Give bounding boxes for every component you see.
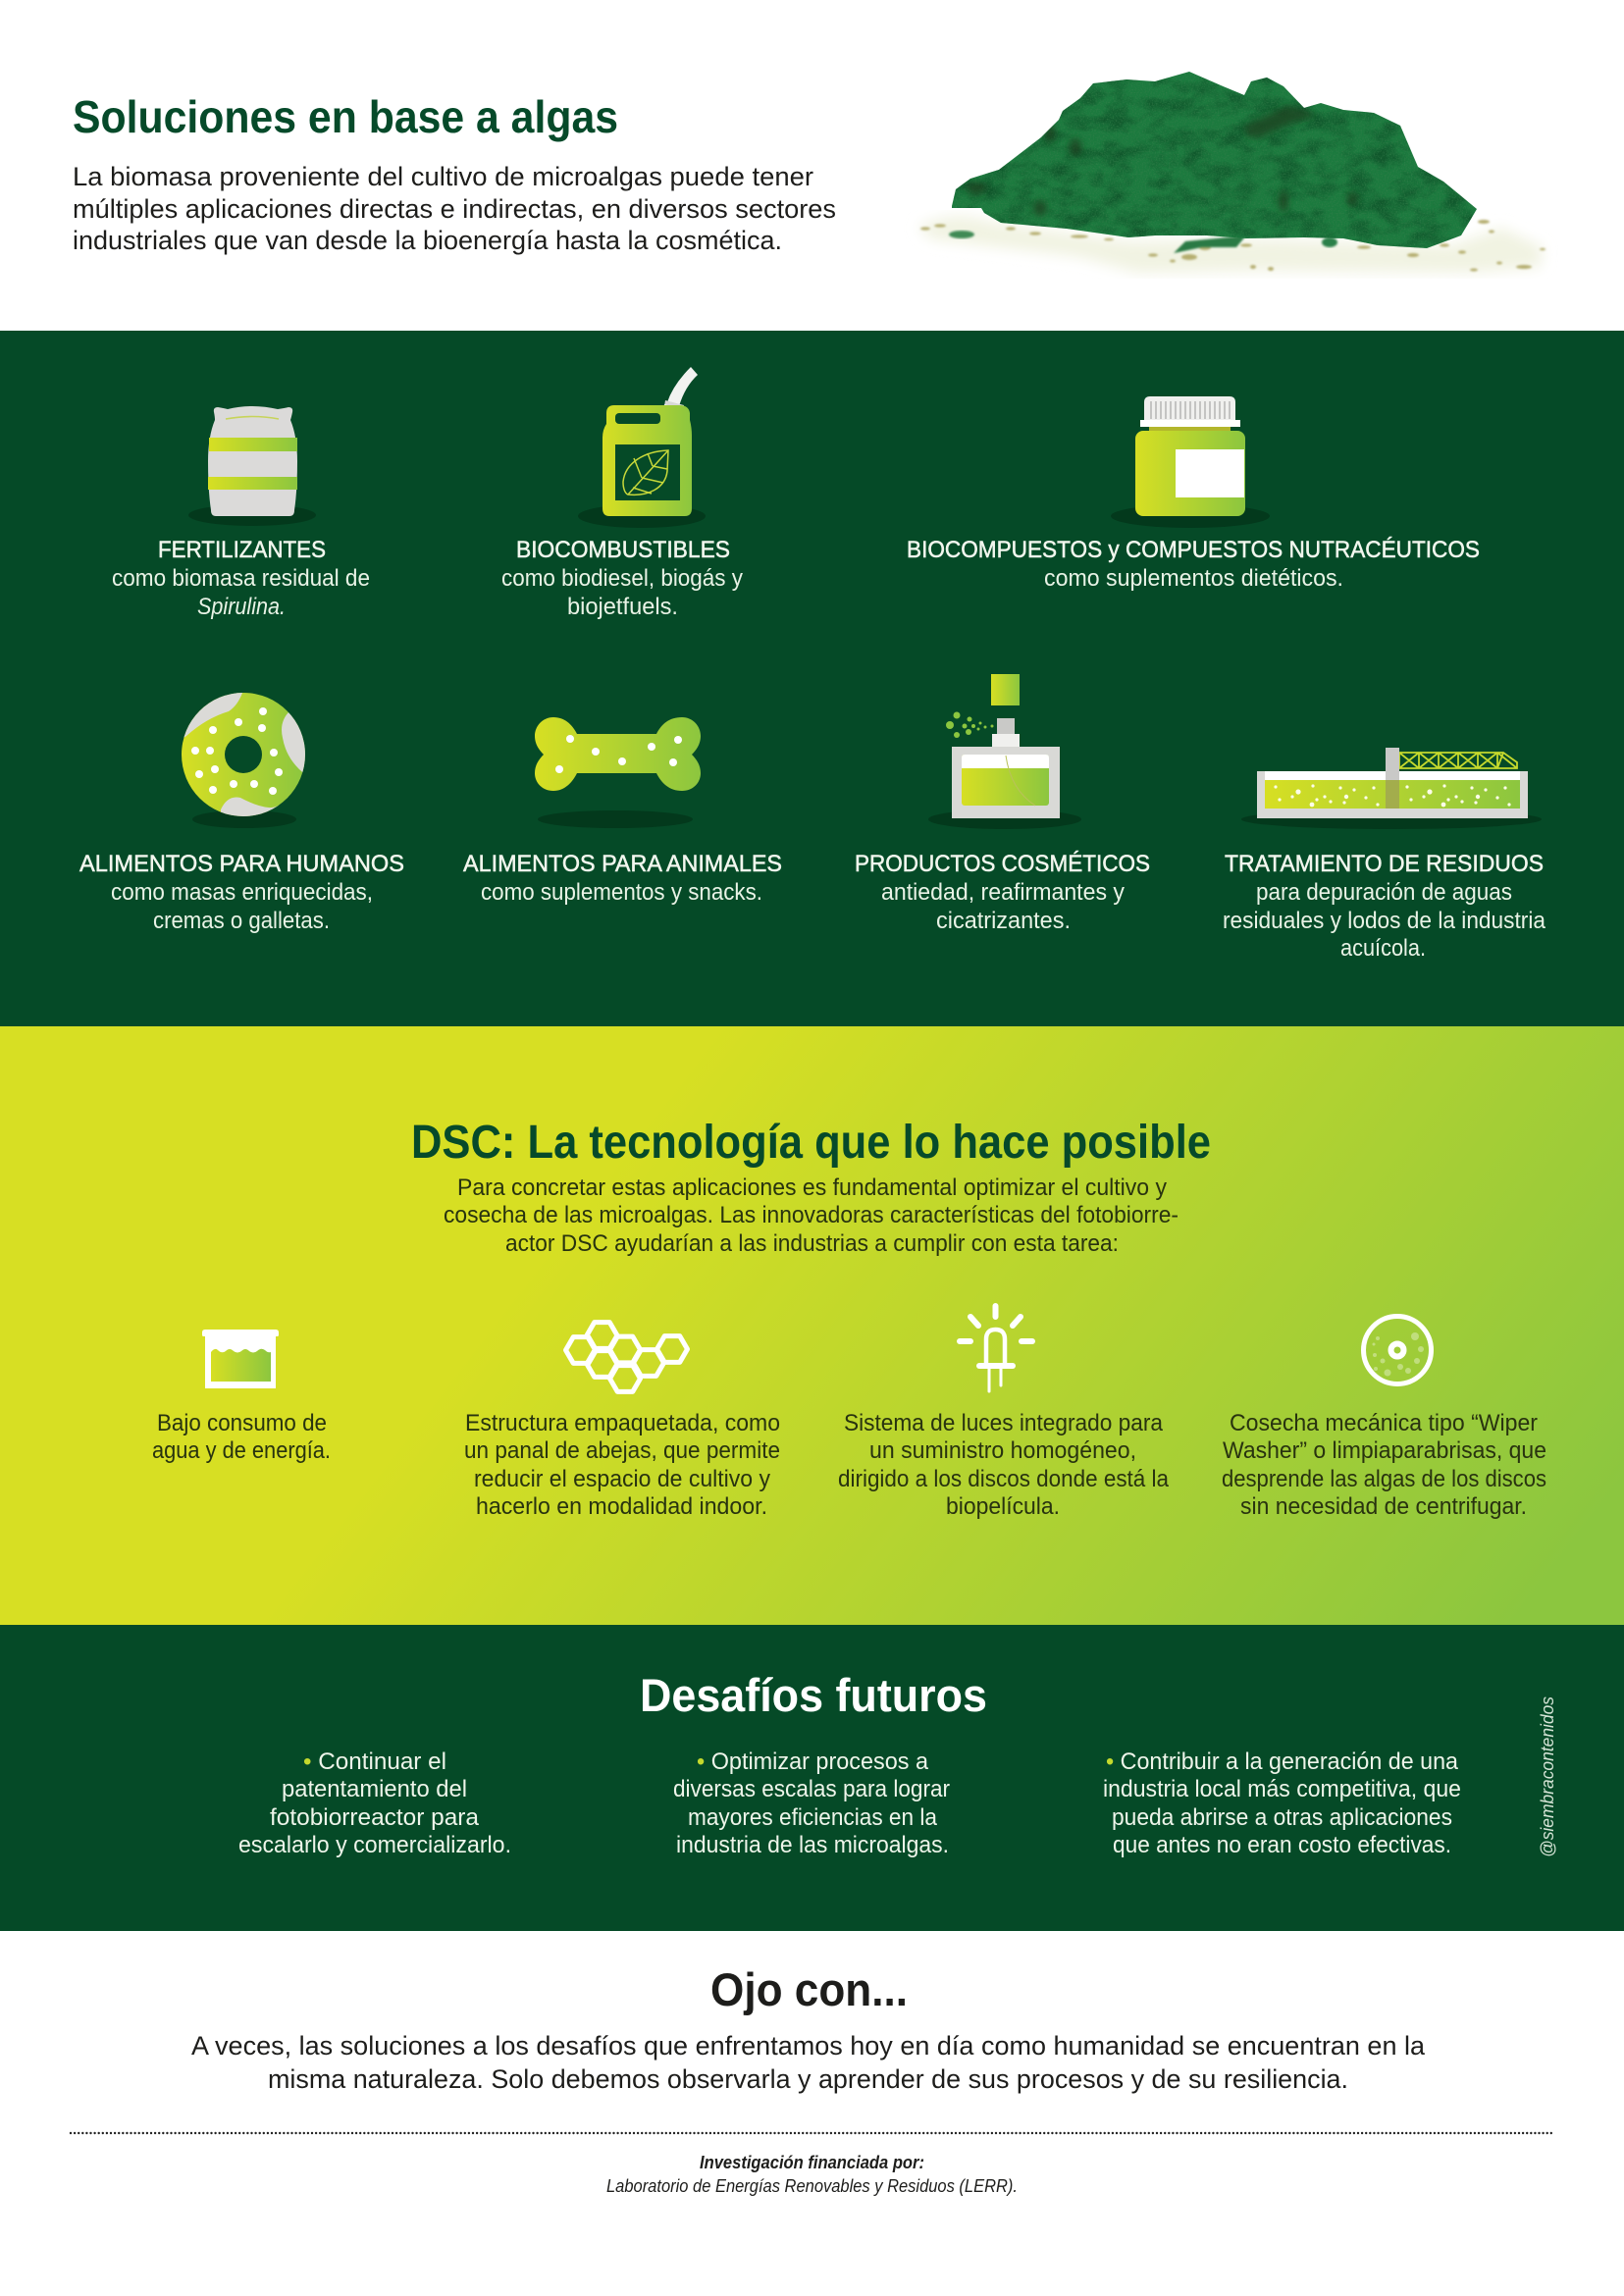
description: como biomasa residual de [112, 565, 370, 592]
challenge 3: que antes no eran costo efectivas. [1113, 1832, 1451, 1858]
text: Washer” o limpiaparabrisas, que [1223, 1437, 1546, 1464]
panel: DSC technology [0, 1026, 1624, 1625]
text: sin necesidad de centrifugar. [1240, 1493, 1527, 1520]
challenge 1 [238, 1748, 511, 1858]
description: como suplementos y snacks. [481, 879, 762, 906]
feature: mechanical harvest [1222, 1317, 1546, 1520]
intro text: Para concretar estas aplicaciones es fundamental optimizar el cultivo y [457, 1174, 1167, 1201]
description: residuales y lodos de la industria [1223, 908, 1546, 934]
label: BIOCOMPUESTOS y COMPUESTOS NUTRACÉUTICOS [907, 537, 1480, 563]
item: tratamiento de residuos [1223, 748, 1546, 962]
text: agua y de energía. [152, 1437, 331, 1464]
panel: ojo con [191, 1963, 1426, 2094]
challenge 1: escalarlo y comercializarlo. [238, 1832, 511, 1858]
text [464, 1410, 780, 1520]
text [191, 2031, 1426, 2094]
text: hacerlo en modalidad indoor. [476, 1493, 767, 1520]
challenge 1: • Continuar el [303, 1748, 446, 1775]
challenge 2: mayores eficiencias en la [688, 1804, 938, 1831]
text: Sistema de luces integrado para [844, 1410, 1164, 1436]
social handle: @siembracontenidos [1538, 1696, 1557, 1857]
feature: integrated lights [838, 1306, 1170, 1520]
text: Cosecha mecánica tipo “Wiper [1230, 1410, 1538, 1436]
text: dirigido a los discos donde está la [838, 1466, 1170, 1492]
icon: donut [182, 693, 305, 828]
intro text [444, 1174, 1179, 1257]
challenge 2: industria de las microalgas. [676, 1832, 949, 1858]
heading: Desafíos futuros [640, 1669, 987, 1721]
description: cicatrizantes. [936, 908, 1071, 934]
label: ALIMENTOS PARA HUMANOS [79, 851, 404, 877]
text: desprende las algas de los discos [1222, 1466, 1546, 1492]
image: spirulina powder pile [917, 72, 1545, 273]
text: misma naturaleza. Solo debemos observarla y aprender de sus procesos y de su resiliencia. [268, 2064, 1348, 2094]
intro text: industriales que van desde la bioenergía hasta la cosmética. [73, 226, 782, 255]
item: fertilizantes [112, 406, 370, 620]
description: cremas o galletas. [153, 908, 330, 934]
text: Estructura empaquetada, como [465, 1410, 780, 1436]
intro text: La biomasa proveniente del cultivo de microalgas puede tener [73, 162, 813, 191]
panel: applications [0, 331, 1624, 1026]
item: alimentos humanos [79, 682, 404, 934]
footer credit: Laboratorio de Energías Renovables y Residuos (LERR). [606, 2176, 1018, 2196]
icon: supplement jar [1111, 396, 1270, 528]
title: Soluciones en base a algas [73, 91, 618, 142]
feature: packed structure [464, 1323, 780, 1520]
description: acuícola. [1340, 935, 1426, 962]
panel background [0, 331, 1624, 1026]
challenge 3: industria local más competitiva, que [1103, 1776, 1461, 1802]
text: A veces, las soluciones a los desafíos que enfrentamos hoy en día como humanidad se encuentran en la [191, 2031, 1426, 2061]
text [838, 1410, 1170, 1520]
description: biojetfuels. [567, 594, 678, 620]
heading: DSC: La tecnología que lo hace posible [411, 1117, 1211, 1169]
label: TRATAMIENTO DE RESIDUOS [1225, 851, 1544, 877]
text: Bajo consumo de [157, 1410, 327, 1436]
header panel [73, 72, 1545, 273]
intro text: múltiples aplicaciones directas e indirectas, en diversos sectores [73, 194, 836, 224]
label: FERTILIZANTES [158, 537, 326, 563]
description: como biodiesel, biogás y [501, 565, 743, 592]
description: como suplementos dietéticos. [1044, 565, 1343, 592]
feature: water and energy [152, 1330, 331, 1464]
description [111, 879, 373, 934]
icon: honeycomb [565, 1323, 687, 1391]
icon: sack [188, 406, 316, 526]
icon: fuel can [578, 367, 706, 528]
icon: perfume bottle [928, 674, 1081, 829]
panel background [0, 1026, 1624, 1625]
description: antiedad, reafirmantes y [881, 879, 1125, 906]
text: un panal de abejas, que permite [464, 1437, 780, 1464]
footer credit [606, 2153, 1018, 2196]
text: reducir el espacio de cultivo y [474, 1466, 770, 1492]
icon: LED bulb [960, 1306, 1032, 1391]
text [1222, 1410, 1546, 1520]
heading: Ojo con... [710, 1963, 908, 2015]
challenge 1: fotobiorreactor para [270, 1804, 480, 1831]
panel: future challenges [0, 1625, 1624, 1931]
challenge 2 [673, 1748, 950, 1858]
intro text: cosecha de las microalgas. Las innovadoras características del fotobiorre- [444, 1202, 1179, 1228]
description: Spirulina. [197, 594, 286, 620]
description [112, 565, 370, 620]
text [152, 1410, 331, 1464]
text: un suministro homogéneo, [869, 1437, 1136, 1464]
challenge 3: pueda abrirse a otras aplicaciones [1112, 1804, 1452, 1831]
text: biopelícula. [946, 1493, 1060, 1520]
description [1223, 879, 1546, 962]
challenge 3: • Contribuir a la generación de una [1106, 1748, 1459, 1775]
footer credit: Investigación financiada por: [700, 2153, 924, 2172]
challenge 2: diversas escalas para lograr [673, 1776, 950, 1802]
icon: bone [535, 717, 701, 828]
item: biocombustibles [501, 367, 743, 620]
intro text: actor DSC ayudarían a las industrias a cumplir con esta tarea: [505, 1230, 1119, 1257]
item: cosmeticos [855, 674, 1150, 934]
icon: treatment tank [1241, 748, 1542, 829]
panel background [0, 1625, 1624, 1931]
description [881, 879, 1125, 934]
label: BIOCOMBUSTIBLES [516, 537, 730, 563]
description: para depuración de aguas [1256, 879, 1512, 906]
challenge 2: • Optimizar procesos a [697, 1748, 929, 1775]
item: alimentos animales [463, 717, 782, 906]
label: PRODUCTOS COSMÉTICOS [855, 851, 1150, 877]
description: como masas enriquecidas, [111, 879, 373, 906]
icon: beaker [202, 1330, 279, 1388]
description [501, 565, 743, 620]
label: ALIMENTOS PARA ANIMALES [463, 851, 782, 877]
intro text [73, 162, 836, 255]
challenge 3 [1103, 1748, 1461, 1858]
item: biocompuestos [907, 396, 1480, 592]
challenge 1: patentamiento del [282, 1776, 467, 1802]
icon: disc [1364, 1317, 1431, 1383]
